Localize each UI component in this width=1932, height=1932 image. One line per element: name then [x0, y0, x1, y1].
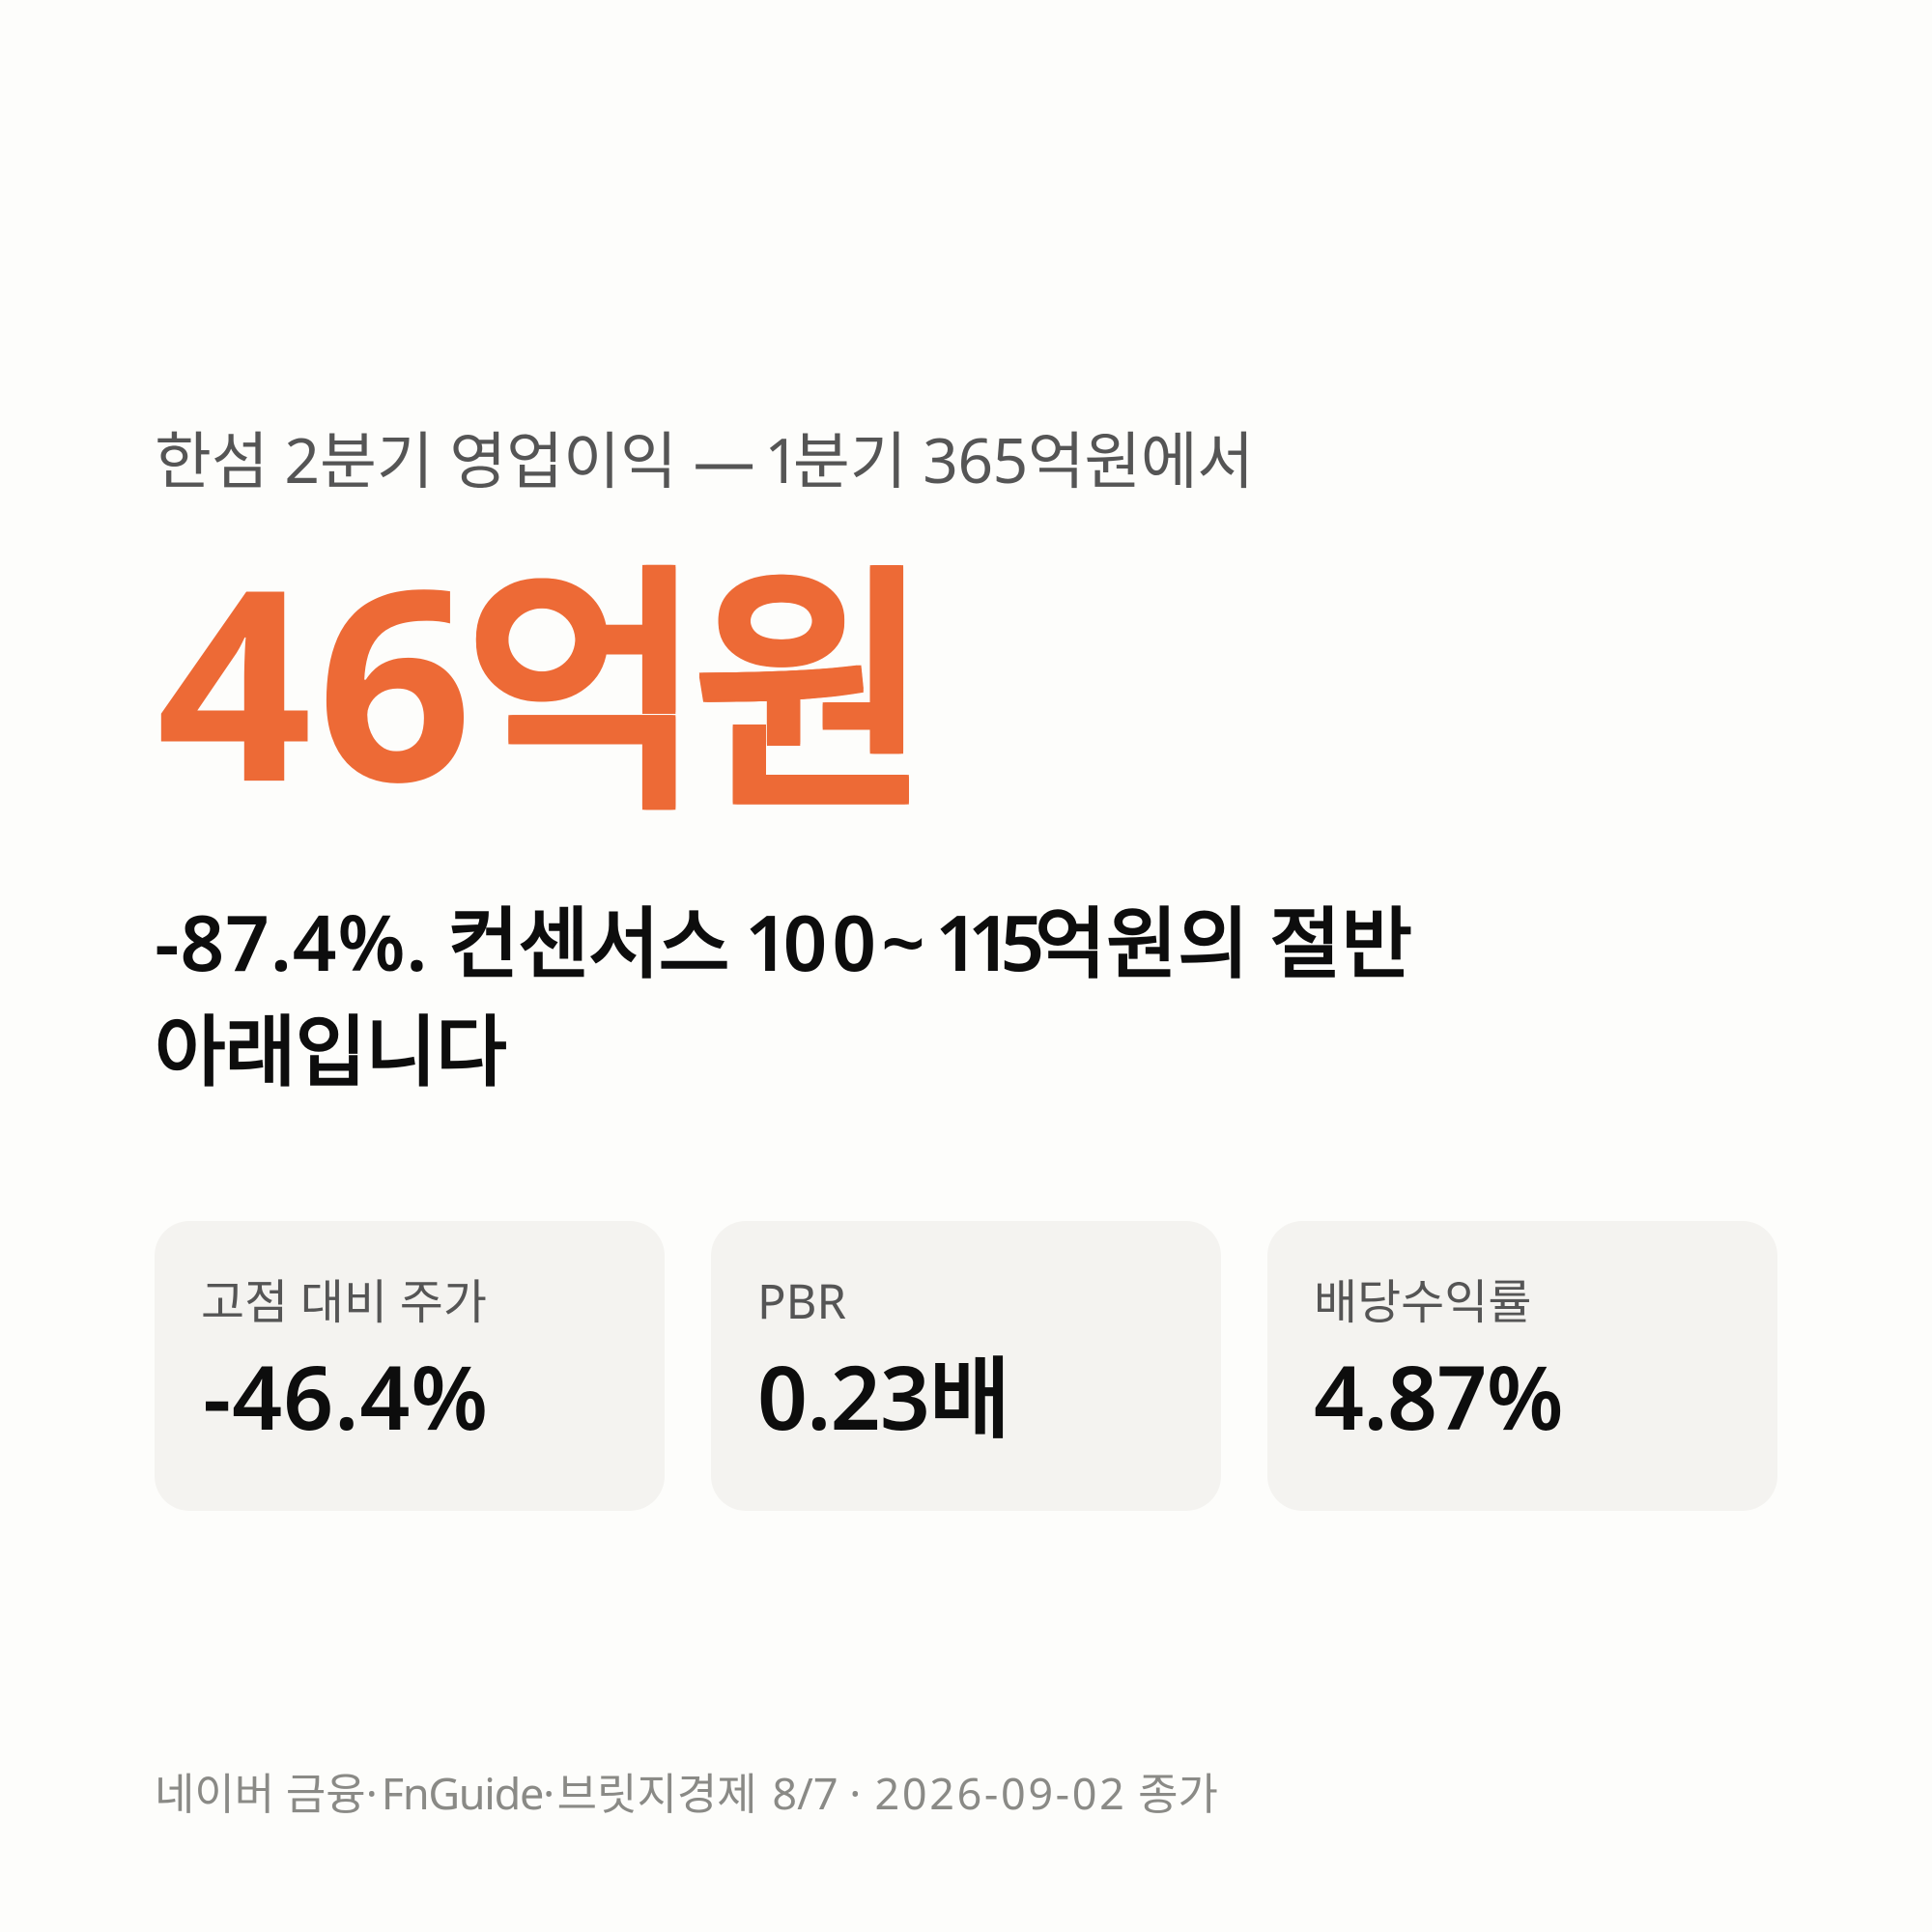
card: PBR	[711, 1221, 1221, 1511]
hero number: 46	[156, 498, 477, 858]
subtitle: 한섬 2분기 영업이익 — 1분기 365억원에서	[155, 417, 1254, 501]
label: 고점 대비 주가	[201, 1269, 487, 1333]
headline: -87.4%. 컨센서스 100~115억원의 절반	[155, 889, 1412, 994]
value: -46.4%	[203, 1336, 489, 1456]
card: 배당수익률	[1267, 1221, 1777, 1511]
value: 4.87%	[1314, 1336, 1563, 1456]
label: PBR	[757, 1269, 846, 1333]
card: 고점 대비 주가	[155, 1221, 665, 1511]
headline: 아래입니다	[155, 997, 506, 1102]
hero number: 억원	[466, 509, 923, 859]
label: 배당수익률	[1314, 1269, 1531, 1333]
value: 0.23배	[757, 1336, 1009, 1456]
hero number	[156, 498, 923, 859]
headline	[155, 889, 1412, 1102]
source footer: 네이버 금융·FnGuide·브릿지경제 8/7 · 2026-09-02 종가	[155, 1764, 1218, 1823]
